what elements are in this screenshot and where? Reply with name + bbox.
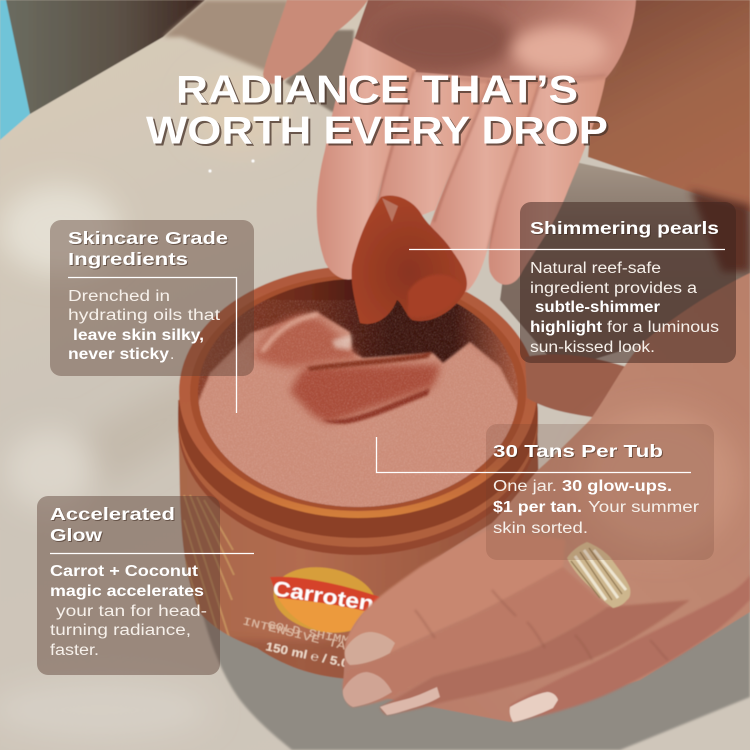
body text bbox=[530, 260, 719, 356]
shimmer sparkles bbox=[198, 300, 520, 510]
cream lip bbox=[322, 388, 430, 424]
ring finger bbox=[430, 78, 542, 295]
heading: Shimmering pearls bbox=[530, 218, 719, 238]
pouring hand bbox=[263, 0, 636, 324]
inner jar wall bbox=[190, 275, 526, 511]
divider line bbox=[50, 552, 254, 554]
finger separations bbox=[374, 72, 540, 250]
brand label lower half bbox=[278, 598, 364, 632]
product jar bbox=[170, 266, 550, 690]
middle finger bbox=[343, 567, 607, 707]
little finger bbox=[510, 575, 750, 722]
palm highlight bbox=[512, 26, 608, 74]
body text: for a luminous bbox=[607, 319, 719, 336]
heading: Glow bbox=[50, 525, 102, 545]
body text: Carrot + Coconut bbox=[50, 563, 198, 580]
knuckle creases bbox=[415, 590, 668, 660]
brand banner bbox=[270, 577, 380, 615]
palm dark hollow bbox=[375, 10, 515, 70]
pool water corner bbox=[0, 0, 30, 140]
brand name: Carroten bbox=[271, 577, 376, 616]
upper right forearm bbox=[588, 0, 750, 212]
cream surface bbox=[198, 312, 518, 510]
back of hand bbox=[343, 273, 750, 722]
heading: 30 Tans Per Tub bbox=[493, 441, 663, 461]
body text bbox=[50, 563, 207, 659]
body text: magic accelerates bbox=[50, 583, 204, 600]
brand label circle bbox=[273, 566, 374, 634]
ring finger bbox=[380, 600, 690, 715]
leader line to dollop bbox=[409, 248, 725, 250]
body text: subtle-shimmer bbox=[535, 299, 660, 316]
body text: skin sorted. bbox=[493, 520, 588, 537]
index finger bbox=[317, 38, 416, 279]
palm leaf stripes bbox=[182, 495, 234, 640]
body text: your tan for head- bbox=[56, 603, 207, 620]
shaded wall bbox=[6, 0, 205, 114]
thumb bbox=[263, 0, 368, 84]
dark shadow at right edge bbox=[690, 190, 750, 272]
recessed thumb bbox=[525, 354, 640, 418]
body text: Your summer bbox=[588, 499, 699, 516]
title bbox=[146, 68, 608, 152]
heading bbox=[50, 504, 175, 545]
fingernail one bbox=[345, 632, 395, 665]
panel: 30 tans per tub bbox=[376, 424, 714, 560]
gold ring bbox=[567, 542, 630, 608]
product size: 150 ml ℮ / 5.07 bbox=[264, 639, 358, 672]
heading: Ingredients bbox=[68, 249, 188, 269]
heading bbox=[68, 228, 228, 269]
palm crease bbox=[416, 72, 606, 82]
middle finger bbox=[372, 72, 492, 235]
body text: hydrating oils that bbox=[68, 307, 221, 324]
dollop right lobe bbox=[408, 275, 462, 317]
leader line to cream bbox=[376, 437, 691, 472]
title: WORTH EVERY DROP bbox=[146, 110, 608, 152]
panel: shimmering pearls bbox=[409, 202, 736, 363]
fingernail four bbox=[510, 692, 558, 722]
fingernail two bbox=[343, 672, 392, 707]
marble mottling bbox=[0, 70, 290, 740]
body text: One jar. bbox=[493, 478, 557, 495]
body text: ingredient provides a bbox=[530, 280, 697, 297]
body text: Drenched in bbox=[68, 288, 170, 305]
product name line one: GOLD SHIMMER bbox=[266, 620, 367, 651]
leader line to cream bbox=[68, 278, 236, 413]
shadow between thumb and index finger bbox=[285, 30, 354, 112]
panel: accelerated glow bbox=[37, 496, 254, 675]
shine on swirl bbox=[332, 335, 352, 350]
heading: Skincare Grade bbox=[68, 228, 228, 248]
fingernail three bbox=[380, 687, 440, 715]
index finger bbox=[345, 530, 565, 665]
title: RADIANCE THAT’S bbox=[176, 68, 578, 112]
knuckle sheen bbox=[580, 410, 740, 550]
product name line two: INTENSIVE TANNING bbox=[241, 616, 389, 664]
shaded marble edge bbox=[163, 0, 290, 72]
cream lower hollow bbox=[290, 364, 440, 423]
cream upper hollow bbox=[253, 314, 360, 368]
jar body bbox=[178, 400, 539, 679]
panel: skincare grade ingredients bbox=[50, 220, 254, 413]
jar rim bbox=[179, 266, 537, 518]
body text: . bbox=[170, 346, 174, 363]
jar shadow on marble bbox=[198, 560, 750, 750]
gripping hand bbox=[343, 273, 750, 722]
body text: turning radiance, bbox=[50, 622, 191, 639]
body text: leave skin silky, bbox=[73, 327, 204, 344]
little finger bbox=[489, 76, 606, 285]
body text: highlight bbox=[530, 319, 602, 336]
body text: 30 glow-ups. bbox=[562, 478, 672, 495]
body text bbox=[493, 478, 699, 537]
body text: sun-kissed look. bbox=[530, 339, 655, 356]
heading: Accelerated bbox=[50, 504, 175, 524]
shadow on marble right of hand bbox=[500, 150, 750, 400]
body text: faster. bbox=[50, 642, 99, 659]
palm bbox=[354, 0, 636, 82]
body text: Natural reef-safe bbox=[530, 260, 661, 277]
body text bbox=[68, 288, 221, 363]
dollop pale facet bbox=[382, 198, 398, 222]
dollop of tanning butter bbox=[352, 195, 467, 324]
cream ridge band bbox=[307, 352, 432, 371]
marble sparkles bbox=[208, 160, 254, 172]
body text: $1 per tan. bbox=[493, 499, 582, 516]
jar lower rings bbox=[178, 295, 538, 555]
cream ridge highlight bbox=[262, 314, 318, 352]
body text: never sticky bbox=[68, 346, 169, 363]
